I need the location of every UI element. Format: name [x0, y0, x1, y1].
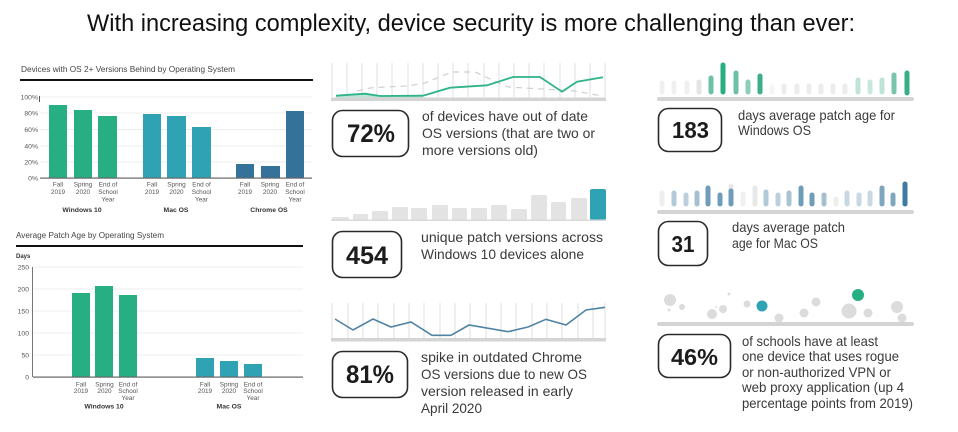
stat text: 183: days average patch age for: [738, 107, 895, 123]
bars: Windows 10: [72, 286, 137, 377]
y axis labels: [21, 94, 38, 182]
group labels: Chrome OS: [250, 207, 288, 214]
heading: patch age chart: Average Patch Age by Operating System: [16, 230, 164, 240]
line chart: out of date devices: [331, 63, 606, 101]
heading: devices chart: Devices with OS 2+ Versions Behind by Operating System: [21, 64, 235, 74]
stat box: 81%: 81%: [346, 361, 394, 389]
y axis labels: 100: [18, 330, 29, 338]
axis unit: Days: [16, 254, 31, 260]
stat text: 46%: one device that uses rogue: [742, 348, 899, 364]
panel: devices with OS 2+ versions behind chart: [20, 64, 313, 214]
group labels: Mac OS: [164, 207, 189, 214]
x axis labels: Fall: [76, 382, 86, 388]
line chart: Chrome OS outdated versions: [331, 303, 606, 342]
stat text: 72%: more versions old): [422, 142, 538, 158]
x axis labels: 2019: [198, 388, 213, 395]
stat text: 46%: of schools have at least: [742, 333, 878, 349]
x axis labels: Year: [102, 196, 115, 204]
x axis labels: 2019: [51, 189, 66, 196]
stat text: 46%: [741, 333, 913, 411]
stat text: 81%: version released in early: [421, 383, 573, 399]
stat text: 454: unique patch versions across: [421, 229, 603, 245]
stat box: 454: 454: [346, 242, 388, 270]
stat text: 46%: web proxy application (up 4: [741, 379, 904, 395]
title: With increasing complexity, device security is more challenging than ever:: [87, 10, 855, 37]
panel: 454 unique patch versions: [331, 189, 606, 278]
group labels: [62, 207, 288, 214]
x axis labels: End of: [192, 182, 211, 188]
x axis labels: Year: [122, 395, 135, 402]
x axis labels: Spring: [95, 382, 114, 388]
bar chart: Mac patch age strip: [657, 184, 914, 214]
x axis labels: 2020: [222, 388, 237, 395]
y axis labels: 40%: [24, 144, 38, 150]
x axis labels: 2020: [169, 189, 184, 196]
y axis labels: 150: [18, 308, 29, 316]
x axis labels: Fall: [147, 182, 157, 188]
x axis labels: End of: [119, 382, 137, 388]
panel: 72% out of date OS: [331, 63, 606, 158]
bars: Mac OS: [143, 114, 211, 178]
stat box: 81%: [332, 352, 408, 398]
x axis labels: 2019: [74, 388, 89, 395]
x axis labels: Fall: [240, 182, 250, 188]
x axis labels: Spring: [74, 182, 93, 188]
bar chart: Windows patch age strip: [657, 65, 914, 101]
x axis labels: Spring: [220, 382, 239, 388]
x axis labels: School: [285, 189, 305, 196]
x axis labels: Year: [195, 196, 209, 204]
stat text: 72%: [422, 108, 595, 158]
stat box: 454: [332, 232, 402, 278]
stat box: 31: 31: [672, 231, 695, 257]
stat box: 183: 183: [672, 117, 709, 143]
stat text: 72%: OS versions (that are two or: [422, 125, 595, 141]
stat text: 81%: April 2020: [421, 400, 482, 416]
y axis labels: 60%: [24, 127, 38, 134]
y axis labels: 0: [25, 374, 29, 382]
x axis labels: End of: [99, 182, 117, 188]
y axis labels: 20%: [24, 160, 38, 166]
stat text: 46%: percentage points from 2019): [742, 395, 913, 411]
x axis labels: Year: [289, 196, 302, 204]
stat text: 183: [738, 107, 895, 138]
stat text: 81%: spike in outdated Chrome: [421, 349, 582, 365]
stat text: 72%: of devices have out of date: [422, 108, 588, 124]
stat text: 454: Windows 10 devices alone: [421, 246, 584, 262]
stat text: 81%: [421, 349, 587, 416]
x axis labels: [74, 382, 263, 402]
stat text: 183: Windows OS: [738, 122, 811, 138]
x axis labels: 2019: [145, 189, 160, 196]
bars: Mac OS: [196, 358, 262, 377]
x axis labels: End of: [286, 182, 304, 188]
stat box: 31: [658, 222, 708, 266]
bars: Chrome OS: [236, 111, 304, 178]
x axis labels: Year: [247, 395, 260, 402]
stat box: 46%: 46%: [671, 344, 718, 370]
y axis labels: 200: [18, 286, 29, 294]
stat text: 31: age for Mac OS: [732, 235, 818, 251]
panel: 81% Chrome OS spike: [331, 303, 606, 416]
stat text: 454: [421, 229, 603, 262]
y axis labels: [18, 264, 29, 382]
stat text: 31: days average patch: [732, 219, 845, 235]
panel: 46% rogue VPN schools: [657, 289, 914, 411]
x axis labels: Spring: [167, 182, 186, 188]
x axis labels: Fall: [200, 382, 210, 388]
x axis labels: Spring: [261, 182, 280, 188]
y axis labels: 250: [18, 264, 29, 272]
stat text: 81%: OS versions due to new OS: [421, 366, 587, 382]
stat box: 46%: [658, 334, 730, 378]
x axis labels: 2020: [97, 388, 112, 395]
panel: 31 days Mac patch age: [657, 184, 914, 266]
bars: Windows 10: [49, 105, 117, 178]
dot chart: schools: [657, 289, 914, 326]
stat box: 72%: 72%: [347, 120, 395, 148]
x axis labels: End of: [244, 382, 262, 388]
stat text: 31: [732, 219, 845, 251]
x axis labels: School: [118, 388, 138, 395]
stat box: 72%: [332, 110, 408, 156]
y axis labels: 80%: [24, 110, 38, 118]
group labels: [84, 404, 242, 410]
group labels: Mac OS: [217, 404, 242, 410]
y axis labels: 0%: [28, 176, 38, 182]
x axis labels: School: [243, 388, 263, 395]
x axis labels: School: [98, 189, 118, 196]
x axis labels: Fall: [53, 182, 63, 188]
x axis labels: 2019: [238, 189, 253, 196]
x axis labels: 2020: [263, 189, 278, 196]
group labels: Windows 10: [84, 404, 124, 410]
y axis labels: 100%: [21, 94, 38, 102]
panel: average patch age chart: [16, 230, 303, 410]
stat box: 183: [658, 108, 722, 152]
bar chart: patch versions: [331, 189, 606, 221]
x axis labels: [51, 182, 305, 204]
stat text: 46%: or non-authorized VPN or: [742, 364, 891, 380]
panel: 183 days Windows patch age: [657, 65, 914, 152]
group labels: Windows 10: [62, 207, 102, 214]
y axis labels: 50: [21, 352, 29, 360]
x axis labels: School: [192, 189, 211, 196]
x axis labels: 2020: [76, 189, 91, 196]
